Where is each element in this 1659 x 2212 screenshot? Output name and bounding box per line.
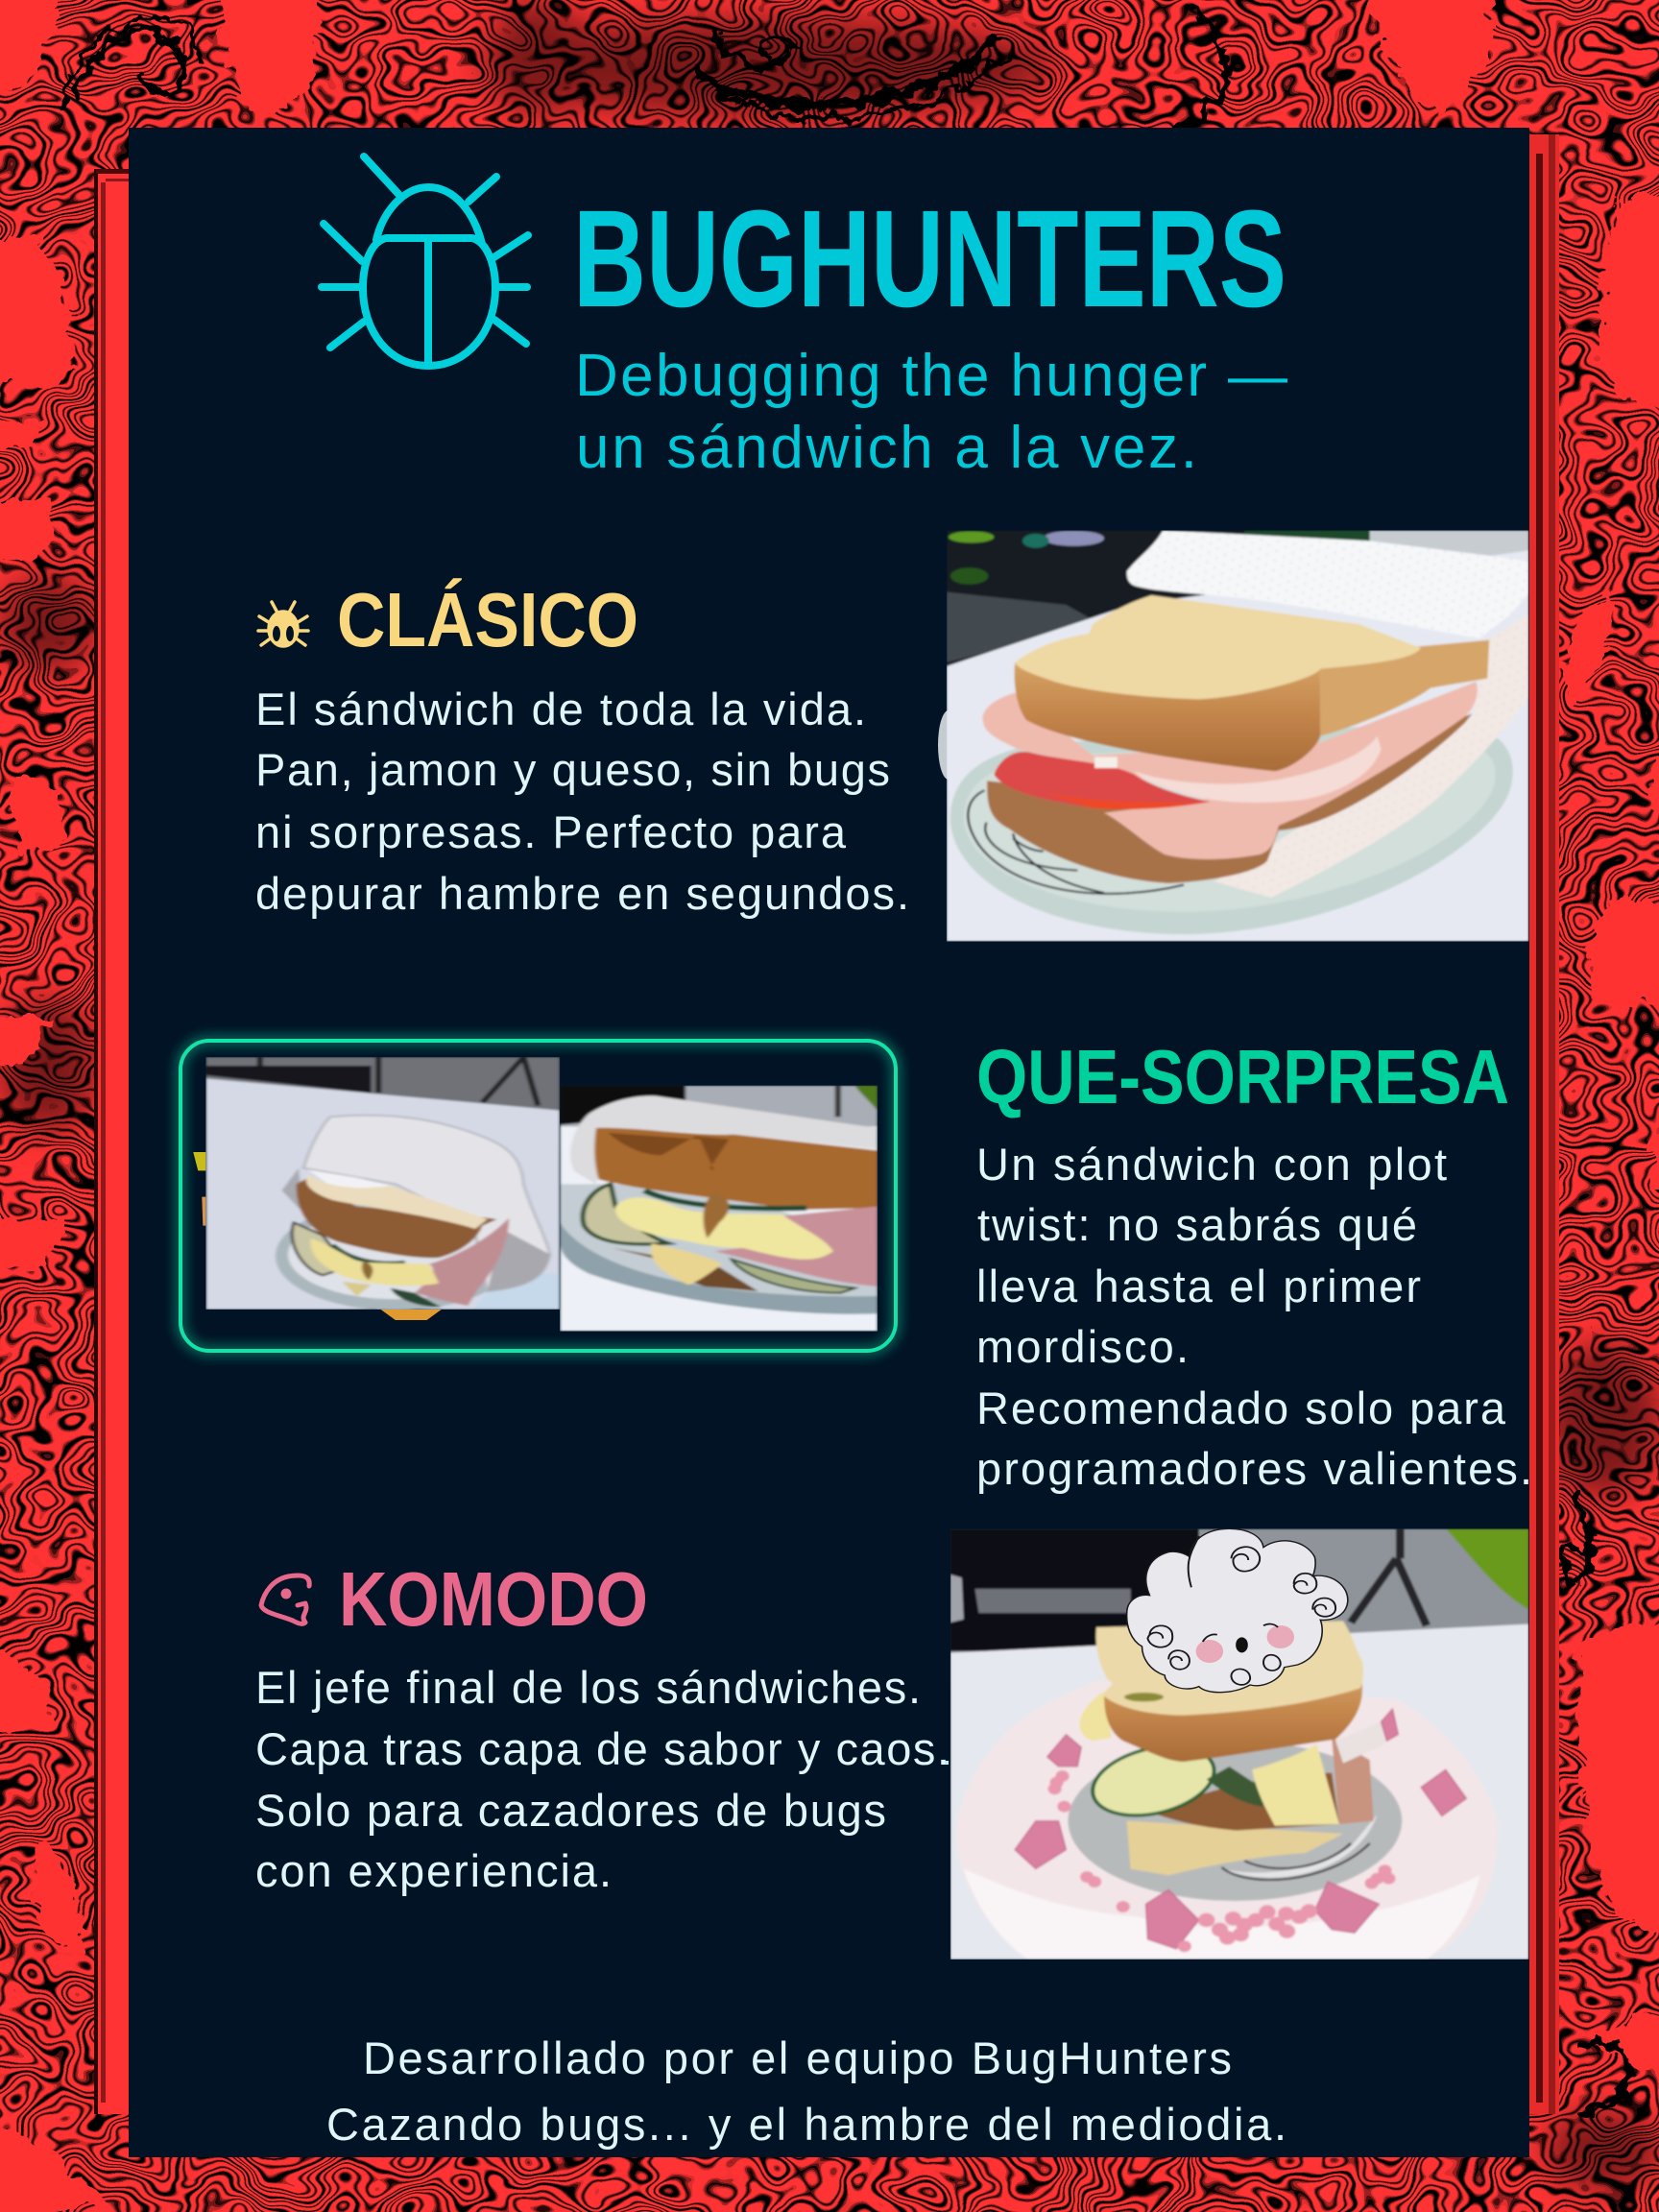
section: que-sorpresa text [976,1034,1532,1494]
inner picture frame, left [94,169,134,2114]
description: programadores valientes. [976,1443,1532,1494]
inner plate [1068,1741,1402,1901]
heading: KOMODO [339,1556,648,1642]
photo: sandwich from above [205,1057,560,1310]
bottom bread and cheese [1127,1821,1343,1875]
top paper towel [1127,530,1528,638]
footer credit: Desarrollado por el equipo BugHunters [363,2032,1232,2083]
outer scalloped plate [956,1680,1498,1960]
heading: QUE-SORPRESA [976,1034,1509,1119]
top bread crust [1104,1671,1362,1762]
description: Pan, jamon y queso, sin bugs [255,744,890,795]
description: Capa tras capa de sabor y caos. [255,1723,950,1774]
heading: CLÁSICO [337,577,638,662]
tagline: Debugging the hunger — [575,343,1287,409]
photo: sandwich side view [560,1086,878,1332]
description: Un sándwich con plot [976,1139,1447,1190]
cloud topper [1127,1528,1348,1693]
bottom bread [987,713,1472,883]
description: twist: no sabrás qué [977,1199,1417,1250]
photos [193,1057,878,1332]
nose [1236,1637,1248,1652]
description [976,1139,1532,1494]
pink gems [1015,1709,1466,1949]
description [255,1662,950,1896]
icon: small bug [258,602,308,646]
neon frame [180,1041,896,1351]
tomato [994,752,1211,809]
top bread crumb [1096,1621,1363,1716]
section: que-sorpresa photo box [180,1041,896,1351]
description [255,684,909,919]
small cyan speck [945,1761,949,1765]
tagline [575,343,1287,481]
description: Recomendado solo para [976,1382,1506,1433]
photo: komodo sandwich [950,1528,1528,1960]
title: BUGHUNTERS [573,181,1286,336]
cheese [1252,1744,1339,1826]
section: komodo [255,1556,950,1896]
onion [1135,736,1382,803]
header [322,156,1287,481]
photo: classic sandwich [947,530,1528,942]
footer credit: Cazando bugs... y el hambre del mediodia. [326,2099,1286,2150]
icon: beetle logo [322,156,528,366]
top bread crumb [1015,595,1421,699]
inner picture frame, right [1525,134,1559,2114]
description: depurar hambre en segundos. [255,868,909,919]
icon: komodo head [261,1575,309,1623]
plate spirals [968,790,1184,894]
description: Solo para cazadores de bugs [255,1785,886,1836]
plate edge peeking left of photo [938,710,959,780]
pink beads [1047,1770,1396,1952]
description: El sándwich de toda la vida. [255,684,866,734]
footer credit [326,2032,1286,2150]
section: clásico [255,577,909,919]
tagline: un sándwich a la vez. [576,415,1197,481]
cucumber [1082,1734,1225,1828]
description: lleva hasta el primer [976,1261,1421,1311]
neon frame glow [180,1041,896,1351]
leftover cutout bits [193,1152,442,1320]
ham [982,682,1478,859]
top bread crust [1015,662,1320,771]
panel: dark navy card [129,128,1529,2157]
description: El jefe final de los sándwiches. [255,1662,921,1713]
paper towel under sandwich [1214,614,1528,898]
description: con experiencia. [255,1845,612,1896]
blush cheeks [1196,1640,1223,1663]
swirls [1147,1536,1335,1685]
description: ni sorpresas. Perfecto para [255,806,847,857]
ham and crust middle [1332,1738,1374,1824]
description: mordisco. [976,1321,1189,1372]
